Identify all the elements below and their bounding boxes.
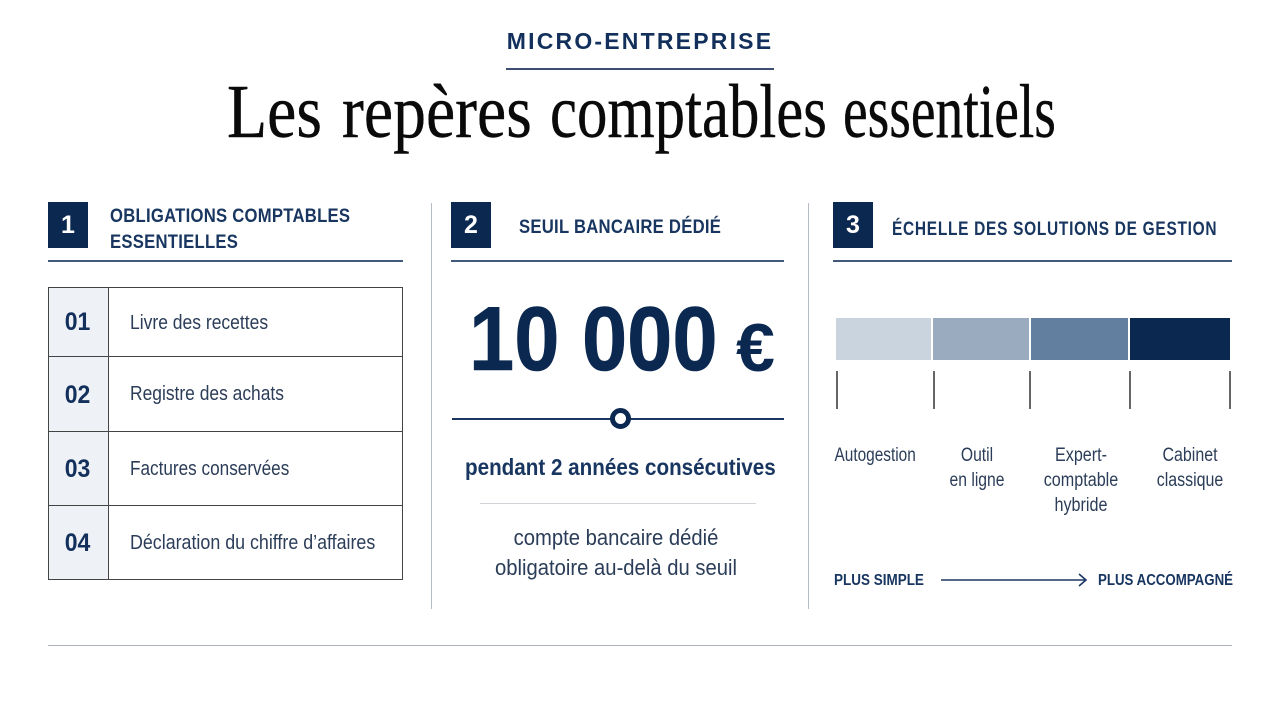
label Cabinet classique: Cabinet	[1162, 445, 1218, 466]
row 02	[49, 357, 402, 432]
label Autogestion: Autogestion	[834, 445, 915, 466]
row 02: Registre des achats	[130, 383, 284, 405]
badge 1	[48, 202, 88, 248]
title	[227, 70, 1056, 154]
label Outil en ligne	[949, 445, 1004, 491]
threshold amount: 10 000	[469, 288, 718, 390]
heading text: ESSENTIELLES	[110, 231, 238, 253]
panel: obligations	[48, 202, 403, 580]
badge 3	[833, 202, 873, 248]
arrow	[941, 573, 1088, 587]
badge 2	[451, 202, 491, 248]
label Cabinet classique: classique	[1157, 470, 1223, 491]
panel: seuil bancaire	[451, 202, 784, 580]
heading: section 1	[48, 202, 350, 253]
label plus simple: PLUS SIMPLE	[834, 572, 924, 589]
label Cabinet classique	[1157, 445, 1223, 491]
heading text: SEUIL BANCAIRE DÉDIÉ	[519, 216, 721, 238]
table of obligations	[48, 287, 403, 580]
threshold amount: €	[736, 310, 775, 386]
heading text: OBLIGATIONS COMPTABLES	[110, 205, 350, 227]
eyebrow: MICRO-ENTREPRISE	[507, 28, 773, 54]
row 02: 02	[65, 381, 90, 409]
row 01: Livre des recettes	[130, 312, 268, 334]
row 01: 01	[65, 308, 90, 336]
title: repères	[342, 70, 532, 154]
label Expert-comptable hybride	[1044, 445, 1118, 516]
eyebrow underline	[506, 68, 774, 70]
title: comptables	[550, 70, 827, 154]
row 04: 04	[65, 528, 90, 556]
requirement text: obligatoire au-delà du seuil	[495, 555, 737, 580]
badge 3: 3	[846, 211, 860, 239]
label Outil en ligne: en ligne	[949, 470, 1004, 491]
row 04: Déclaration du chiffre d’affaires	[130, 532, 375, 554]
row 03: Factures conservées	[130, 458, 289, 480]
label Expert-comptable hybride: Expert-	[1055, 445, 1107, 466]
row 04	[49, 506, 375, 579]
label Outil en ligne: Outil	[960, 445, 993, 466]
label Expert-comptable hybride: hybride	[1055, 495, 1107, 516]
title: Les	[227, 70, 322, 154]
requirement text: compte bancaire dédié	[514, 525, 718, 550]
row 03	[49, 432, 402, 506]
heading text: ÉCHELLE DES SOLUTIONS DE GESTION	[892, 218, 1217, 240]
badge 2: 2	[464, 211, 478, 239]
scale bar	[836, 318, 1230, 360]
row 03: 03	[65, 454, 90, 482]
label plus accompagné: PLUS ACCOMPAGNÉ	[1098, 572, 1233, 589]
row 01	[49, 288, 402, 357]
badge 1: 1	[61, 211, 75, 239]
requirement text	[495, 525, 737, 580]
label Expert-comptable hybride: comptable	[1044, 470, 1118, 491]
heading text	[110, 205, 350, 253]
title: essentiels	[843, 70, 1056, 154]
slider line with marker	[452, 408, 784, 429]
duration text: pendant 2 années consécutives	[465, 454, 776, 480]
